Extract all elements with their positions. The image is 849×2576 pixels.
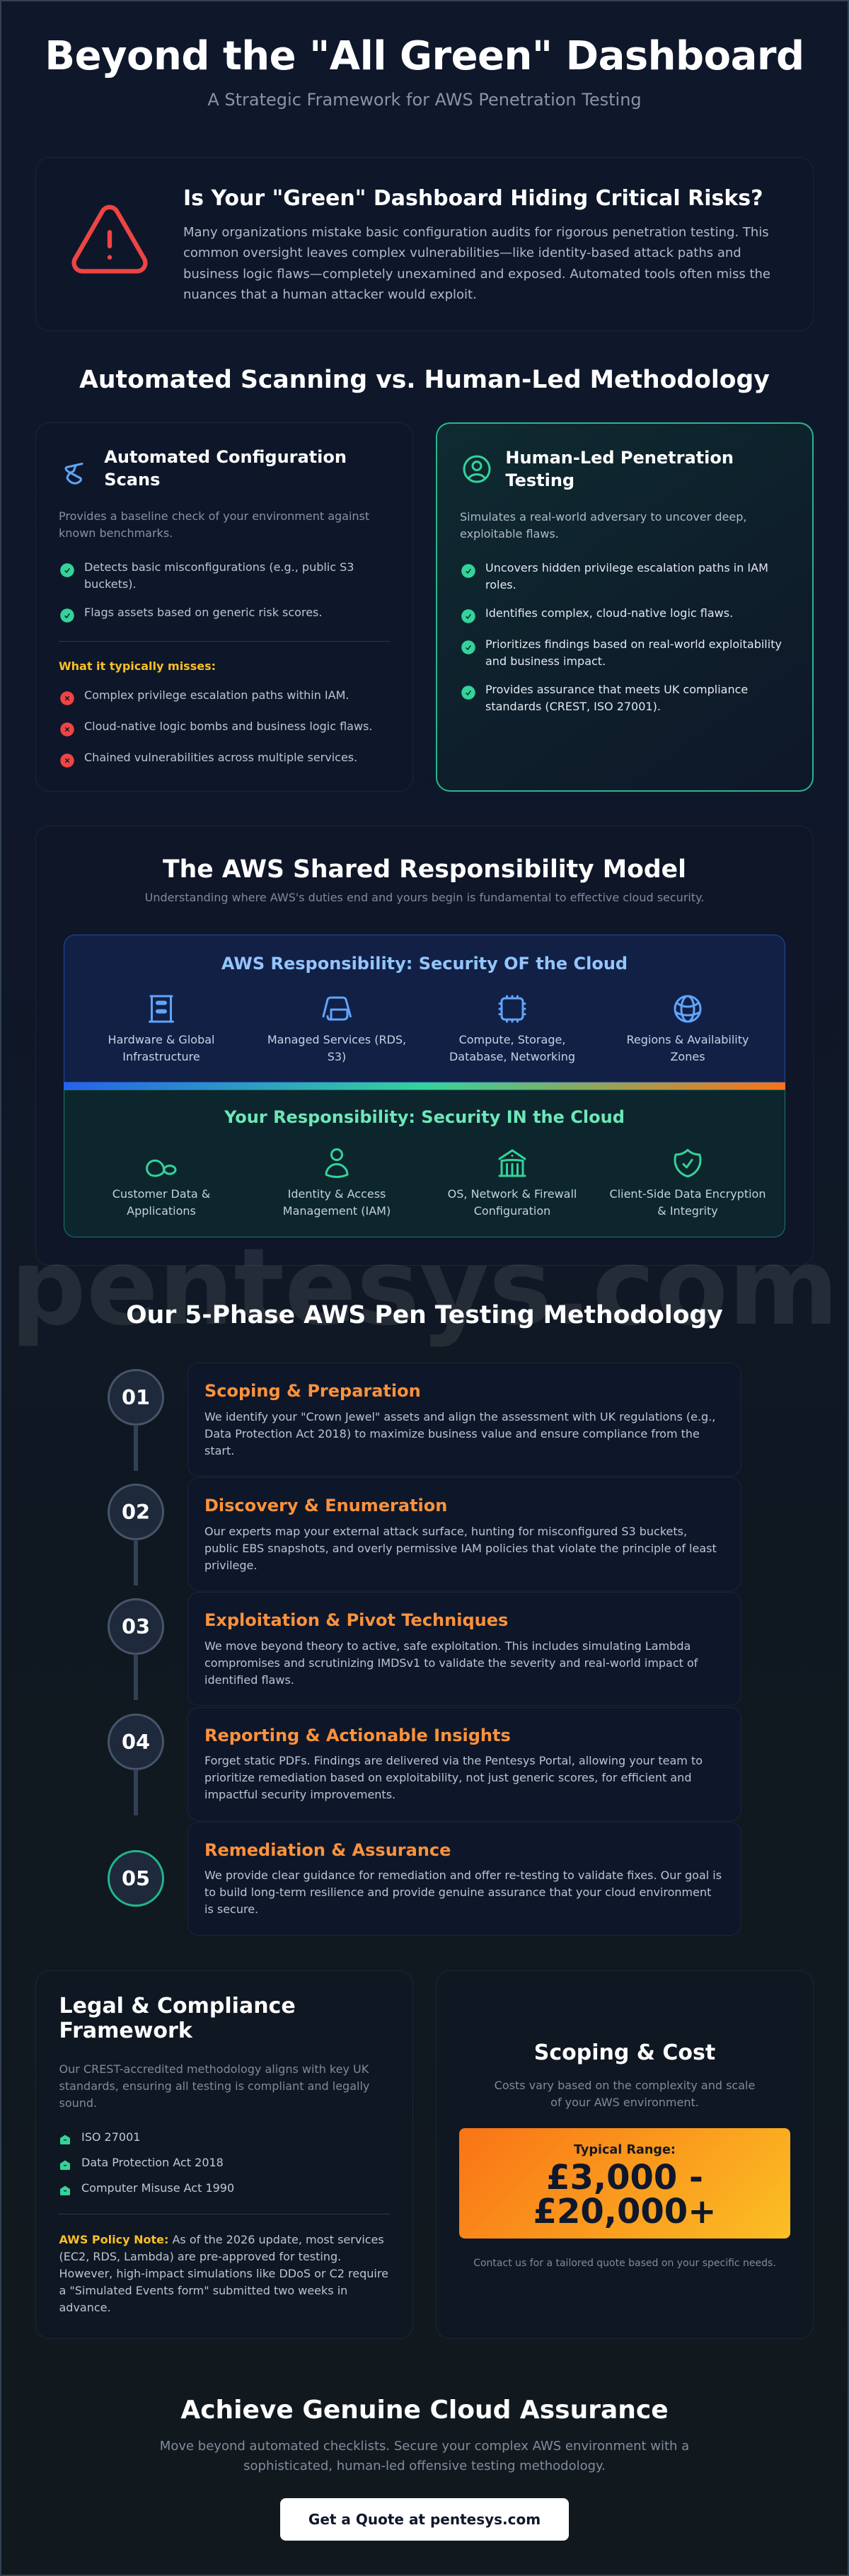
subtitle: A Strategic Framework for AWS Penetration Testing [207,90,642,110]
box: customer responsibility [64,1090,785,1237]
item: detects misconfigurations: buckets). [84,577,137,590]
number 05 [108,1850,164,1907]
heading: comparison section: Automated Scanning vs. Human-Led Methodology [79,366,770,394]
panel: critical risk alert [35,157,814,331]
item: privilege escalation paths [461,560,768,591]
price label: Typical Range: [574,2143,676,2157]
box: customer responsibility: Applications [127,1204,196,1217]
item: flags assets: Flags assets based on generic risk scores. [84,606,322,618]
phase card: Our experts map your external attack surface, hunting for misconfigured S3 buckets, [204,1525,687,1538]
box: AWS responsibility: S3) [328,1050,346,1063]
price range box [459,2128,790,2239]
phase card [187,1592,741,1706]
item: prioritizes findings: and business impact. [485,654,606,668]
panel description [59,2062,369,2110]
phase card: Discovery & Enumeration [204,1496,447,1515]
icon: scan squiggle [65,463,83,485]
phase card: prioritize remediation based on exploitability, not just generic scores, for efficient and [204,1771,691,1784]
button: get a quote: Get a Quote at pentesys.com [308,2511,541,2528]
phase 2 [108,1477,741,1591]
phase 3 [108,1592,741,1706]
card heading: Testing [505,470,574,490]
phase card: We move beyond theory to active, safe exploitation. This includes simulating Lambda [204,1639,691,1653]
phase card [187,1822,741,1936]
panel description: standards, ensuring all testing is compliant and legally [59,2079,369,2093]
number 02 [108,1484,164,1540]
item: hardware [108,995,214,1063]
item: compliance assurance [461,682,748,713]
alert body text: Many organizations mistake basic configuration audits for rigorous penetration testing. This [183,225,769,240]
AWS policy note: AWS Policy Note: As of the 2026 update, most services [59,2233,384,2246]
item: customer data [112,1159,210,1217]
phase card: We provide clear guidance for remediation and offer re-testing to validate fixes. Our goal is [204,1869,722,1882]
item: detects misconfigurations [60,560,354,590]
panel description [436,2077,814,2111]
number 01 [108,1369,164,1426]
phase card: Reporting & Actionable Insights [204,1726,511,1745]
box: customer responsibility: OS, Network & Firewall [448,1187,577,1200]
item: managed services [267,996,406,1063]
divider bar [64,1082,785,1090]
panel footnote: Contact us for a tailored quote based on your specific needs. [473,2257,776,2268]
item: Data Protection Act: Data Protection Act 2018 [81,2156,224,2169]
button: get a quote [280,2498,569,2541]
panel description: Costs vary based on the complexity and scale [495,2079,755,2092]
phase card [187,1707,741,1821]
item: OS and network [448,1149,577,1217]
item: compliance assurance: standards (CREST, ISO 27001). [485,699,661,713]
phase card: privilege. [204,1559,257,1572]
card heading: Human-Led Penetration [505,448,734,468]
phase 4 [108,1707,741,1821]
card description [59,509,369,540]
item: logic flaws: Identifies complex, cloud-native logic flaws. [485,606,733,620]
alert body text: common oversight leaves complex vulnerabilities—like identity-based attack paths and [183,246,741,260]
AWS policy note [59,2233,388,2314]
card description: Simulates a real-world adversary to uncover deep, [460,510,746,524]
item: identity and access [283,1148,391,1217]
panel: scoping and cost [436,1970,814,2339]
box: customer responsibility: Identity & Access [288,1187,386,1200]
panel: automated configuration scans [35,422,413,792]
card heading [104,447,347,490]
icon: user circle [463,456,491,483]
alert body text [183,225,770,302]
AWS policy note: a "Simulated Events form" submitted two weeks in [59,2284,347,2297]
phase card: compromises and scrutinizing IMDSv1 to validate the severity and real-world impact of [204,1656,698,1670]
box: AWS responsibility: Hardware & Global [108,1033,214,1046]
price value [459,2161,790,2229]
panel description: Our CREST-accredited methodology aligns with key UK [59,2062,369,2076]
number 02: 02 [122,1500,150,1524]
item: logic bombs: Cloud-native logic bombs and business logic flaws. [84,719,372,733]
item: regions [627,995,749,1063]
box: customer responsibility: Client-Side Data Encryption [610,1187,766,1200]
box: customer responsibility: & Integrity [657,1204,718,1217]
box: customer responsibility: Customer Data & [112,1187,210,1200]
box heading: Your Responsibility: Security IN the Cloud [224,1107,625,1126]
item: privilege escalation paths: Uncovers hidden privilege escalation paths in IAM [485,560,768,574]
number 04 [108,1714,164,1770]
phase card: public EBS snapshots, and overly permissive IAM policies that violate the principle of least [204,1542,717,1555]
phase card [187,1477,741,1591]
box: AWS responsibility: Compute, Storage, [459,1033,565,1046]
card description: exploitable flaws. [460,527,559,541]
price value: £3,000 - [546,2158,703,2197]
phase card: start. [204,1443,234,1457]
panel: legal and compliance framework [35,1970,413,2339]
phase card: Data Protection Act 2018) to maximize business value and ensure compliance from the [204,1426,700,1440]
call to action body: sophisticated, human-led offensive testing methodology. [243,2459,606,2473]
list: missed items [60,688,372,768]
item: Computer Misuse Act: Computer Misuse Act 1990 [81,2181,234,2195]
phase card [187,1363,741,1477]
item: prioritizes findings: Prioritizes findings based on real-world exploitability [485,637,782,651]
phase 1 [108,1363,741,1477]
alert body text: business logic flaws—completely unexamined and exposed. Automated tools often miss the [183,267,770,282]
list: human-led benefits [461,560,782,713]
alert body text: nuances that a human attacker would exploit. [183,287,477,302]
card description: known benchmarks. [59,526,173,540]
price value: £20,000+ [533,2192,716,2231]
item: privilege escalation paths: roles. [485,577,516,591]
box: AWS responsibility: Infrastructure [122,1050,200,1063]
phase card: identified flaws. [204,1673,294,1687]
box: customer responsibility: Management (IAM) [283,1204,391,1217]
heading: call to action: Achieve Genuine Cloud Assurance [180,2396,669,2425]
item: prioritizes findings [461,637,782,668]
AWS policy note: (EC2, RDS, Lambda) are pre-approved for testing. [59,2250,341,2263]
number 04: 04 [122,1730,150,1754]
box: AWS responsibility: Zones [670,1050,705,1063]
phase card: We identify your "Crown Jewel" assets and align the assessment with UK regulations (e.g., [204,1409,715,1423]
phase card: Scoping & Preparation [204,1381,421,1401]
icon: warning triangle [71,205,148,273]
item: compliance assurance: Provides assurance that meets UK compliance [485,682,748,696]
panel heading: Scoping & Cost [534,2040,715,2064]
item: detects misconfigurations: Detects basic misconfigurations (e.g., public S3 [84,560,354,573]
list: detected items [60,560,354,623]
phase card: is secure. [204,1902,258,1916]
panel description: sound. [59,2096,97,2110]
item: ISO 27001: ISO 27001 [81,2130,140,2144]
box: AWS responsibility: Managed Services (RDS, [267,1033,406,1046]
panel heading: Framework [59,2018,192,2043]
call to action body [0,2437,849,2476]
item: compute [449,995,575,1063]
item: ISO 27001 [60,2130,140,2144]
phase card: Forget static PDFs. Findings are delivered via the Pentesys Portal, allowing your team to [204,1754,703,1767]
phase card: to build long-term resilience and provide genuine assurance that your cloud environment [204,1885,711,1899]
title: Beyond the "All Green" Dashboard [45,33,804,79]
panel: AWS shared responsibility model [35,826,814,1266]
card heading [505,448,734,490]
call to action body: Move beyond automated checklists. Secure your complex AWS environment with a [160,2439,689,2454]
item: chained vulnerabilities: Chained vulnerabilities across multiple services. [84,750,357,764]
phase 5 [108,1822,741,1936]
AWS policy note: advance. [59,2301,111,2314]
item: privilege escalation: Complex privilege escalation paths within IAM. [84,688,349,702]
card heading: Scans [104,470,160,490]
misses heading: What it typically misses: [59,659,216,673]
heading: methodology section: Our 5-Phase AWS Pen Testing Methodology [126,1301,723,1329]
phase card: impactful security improvements. [204,1788,395,1801]
list: compliance standards [60,2130,234,2195]
number 05: 05 [122,1866,150,1890]
box: AWS responsibility [64,935,785,1082]
card heading: Automated Configuration [104,447,347,467]
box: AWS responsibility: Database, Networking [449,1050,575,1063]
phase card: Remediation & Assurance [204,1840,451,1860]
box: AWS responsibility: Regions & Availability [627,1033,749,1046]
box heading: AWS Responsibility: Security OF the Cloud [221,954,628,974]
number 03 [108,1598,164,1655]
panel heading [59,1994,296,2043]
panel heading: Legal & Compliance [59,1994,296,2018]
alert heading: Is Your "Green" Dashboard Hiding Critical Risks? [183,186,763,211]
phase card: Exploitation & Pivot Techniques [204,1610,508,1630]
number 03: 03 [122,1615,150,1639]
box: customer responsibility: Configuration [474,1204,550,1217]
card description: Provides a baseline check of your environment against [59,509,369,523]
card description [460,510,746,541]
section heading: The AWS Shared Responsibility Model [163,855,686,884]
panel description: of your AWS environment. [550,2096,699,2109]
AWS policy note: However, high-impact simulations like DDoS or C2 require [59,2267,388,2280]
section subheading: Understanding where AWS's duties end and yours begin is fundamental to effective cloud security. [145,891,704,904]
number 01: 01 [122,1385,150,1409]
item: encryption [610,1149,766,1217]
panel: human-led penetration testing [436,422,814,792]
watermark: pentesys.com [11,1226,838,1349]
